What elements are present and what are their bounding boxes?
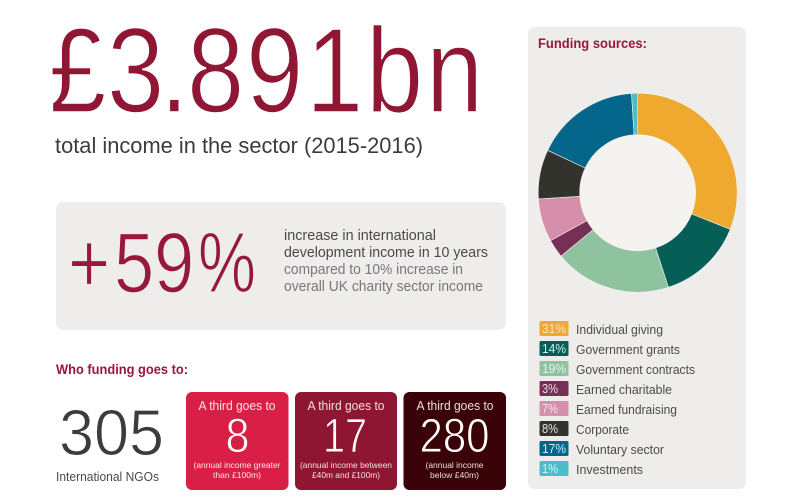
legend: individual giving: 31% <box>542 322 566 336</box>
total NGOs: International NGOs <box>56 469 159 484</box>
card: 8 large NGOs: than £100m) <box>213 471 261 480</box>
legend <box>540 321 695 477</box>
legend: government grants: 14% <box>542 342 566 356</box>
legend: voluntary sector <box>540 441 664 457</box>
increase description: overall UK charity sector income <box>284 279 483 295</box>
headline figure: £3.891bn <box>49 2 483 138</box>
legend: investments: Investments <box>576 463 643 477</box>
legend: earned fundraising <box>540 401 677 417</box>
card: 17 medium NGOs: (annual income between <box>300 461 392 470</box>
donut chart <box>538 93 737 292</box>
increase description: compared to 10% increase in <box>284 262 463 278</box>
card: 8 large NGOs: A third goes to <box>198 398 276 413</box>
card: 280 small NGOs: (annual income <box>426 461 484 470</box>
legend: investments <box>540 461 643 477</box>
legend: earned fundraising: Earned fundraising <box>576 403 677 417</box>
legend: individual giving <box>540 321 663 337</box>
legend: government contracts: 19% <box>542 362 566 376</box>
card: 8 large NGOs: (annual income greater <box>194 461 281 470</box>
increase figure: +59 <box>68 215 194 310</box>
increase description: increase in international <box>284 228 436 244</box>
legend: voluntary sector: Voluntary sector <box>576 443 664 457</box>
card: 17 medium NGOs: 17 <box>323 410 367 463</box>
legend: corporate <box>540 421 629 437</box>
legend: earned charitable: Earned charitable <box>576 383 672 397</box>
legend: individual giving: Individual giving <box>576 323 663 337</box>
heading: funding sources: Funding sources: <box>538 36 647 51</box>
card: 17 medium NGOs: A third goes to <box>308 398 384 413</box>
legend: corporate: Corporate <box>576 423 629 437</box>
increase figure <box>68 215 256 311</box>
increase description <box>284 228 488 295</box>
legend: earned fundraising: 7% <box>542 402 558 416</box>
total NGOs: 305 <box>59 396 164 469</box>
legend: earned charitable: 3% <box>542 382 558 396</box>
panel: funding sources <box>528 27 746 489</box>
panel: income increase <box>56 202 506 330</box>
card: 8 large NGOs: 8 <box>226 410 250 463</box>
legend: investments: 1% <box>542 462 558 476</box>
card: 17 medium NGOs <box>295 392 397 490</box>
legend: government grants <box>540 341 680 357</box>
card: 280 small NGOs: A third goes to <box>416 398 494 413</box>
card: 8 large NGOs <box>186 392 288 490</box>
card: 280 small NGOs: below £40m) <box>430 471 479 480</box>
increase description: development income in 10 years <box>284 245 488 261</box>
legend: voluntary sector: 17% <box>542 442 566 456</box>
legend: government contracts: Government contracts <box>576 363 695 377</box>
increase figure: % <box>198 216 256 311</box>
headline caption: total income in the sector (2015-2016) <box>55 133 423 158</box>
legend: government contracts <box>540 361 695 377</box>
heading: who funding goes to: Who funding goes to: <box>56 361 188 377</box>
legend: earned charitable <box>540 381 672 397</box>
legend: government grants: Government grants <box>576 343 680 357</box>
card: 280 small NGOs: 280 <box>420 410 490 463</box>
card: 280 small NGOs <box>404 392 506 490</box>
card: 17 medium NGOs: £40m and £100m) <box>312 471 380 480</box>
legend: corporate: 8% <box>542 422 558 436</box>
